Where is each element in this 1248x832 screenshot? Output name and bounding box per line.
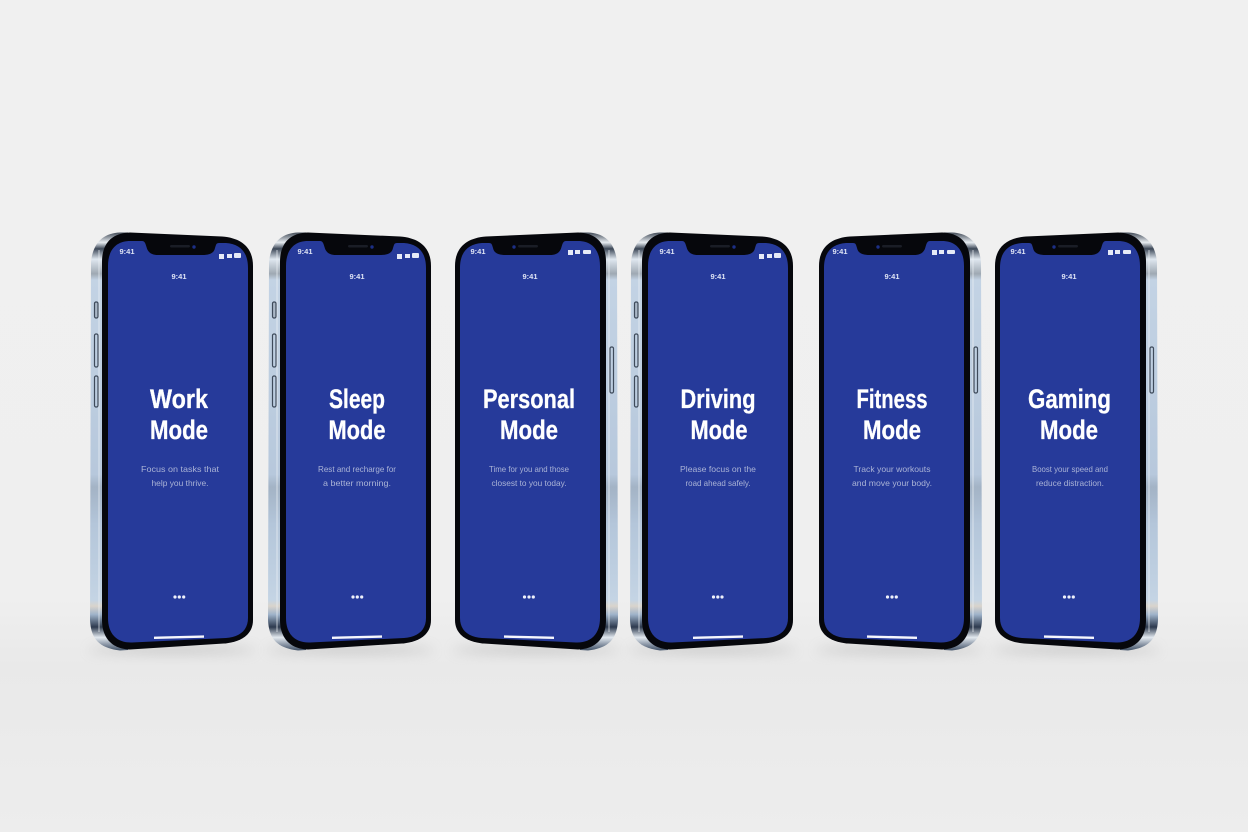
status bar icons xyxy=(219,253,241,259)
heading: Mode xyxy=(328,415,386,445)
floor shadow xyxy=(992,647,1160,653)
status bar icons xyxy=(759,253,781,259)
page dots xyxy=(173,595,185,599)
heading: Personal xyxy=(483,384,575,414)
home indicator xyxy=(504,635,554,639)
phone body xyxy=(630,232,793,650)
description xyxy=(852,464,932,488)
phone: driving mode xyxy=(628,232,796,653)
description xyxy=(1032,464,1108,488)
heading: Mode xyxy=(690,415,748,445)
floor shadow xyxy=(628,647,796,653)
description: and move your body. xyxy=(852,478,932,488)
phone: sleep mode xyxy=(266,232,434,653)
heading: Mode xyxy=(1040,415,1098,445)
floor shadow xyxy=(88,647,256,653)
clock text: 9:41 xyxy=(171,272,187,281)
description: road ahead safely. xyxy=(686,478,750,488)
heading: Fitness xyxy=(856,384,928,414)
description xyxy=(141,464,220,488)
home indicator xyxy=(693,635,743,639)
status bar icons xyxy=(1108,250,1131,255)
clock text: 9:41 xyxy=(349,272,365,281)
page dots xyxy=(523,595,535,599)
description: Track your workouts xyxy=(854,464,930,474)
status bar icons xyxy=(568,250,591,255)
description: Time for you and those xyxy=(489,464,569,474)
home indicator xyxy=(332,635,382,639)
phone body xyxy=(455,232,618,650)
phone body xyxy=(90,232,253,650)
page dots xyxy=(712,595,724,599)
page dots xyxy=(1063,595,1075,599)
status bar time: 9:41 xyxy=(119,247,135,256)
description: reduce distraction. xyxy=(1036,478,1104,488)
description xyxy=(318,464,396,488)
heading: Mode xyxy=(500,415,558,445)
phone: personal mode xyxy=(452,232,620,653)
status bar time: 9:41 xyxy=(832,247,848,256)
page dots xyxy=(351,595,363,599)
heading xyxy=(680,384,756,445)
home indicator xyxy=(154,635,204,639)
status bar time: 9:41 xyxy=(297,247,313,256)
description: closest to you today. xyxy=(492,478,566,488)
home indicator xyxy=(867,635,917,639)
heading xyxy=(483,384,575,445)
heading: Driving xyxy=(680,384,756,414)
heading xyxy=(856,384,928,445)
phone body xyxy=(995,232,1158,650)
description: help you thrive. xyxy=(152,478,208,488)
description: a better morning. xyxy=(323,478,391,488)
status bar time: 9:41 xyxy=(659,247,675,256)
description xyxy=(680,464,756,488)
phone body xyxy=(268,232,431,650)
floor shadow xyxy=(452,647,620,653)
heading: Work xyxy=(150,384,209,414)
status bar time: 9:41 xyxy=(1010,247,1026,256)
heading xyxy=(150,384,209,445)
status bar time: 9:41 xyxy=(470,247,486,256)
clock text: 9:41 xyxy=(522,272,538,281)
floor shadow xyxy=(266,647,434,653)
description xyxy=(489,464,569,488)
heading xyxy=(1028,384,1111,445)
clock text: 9:41 xyxy=(710,272,726,281)
phone body xyxy=(819,232,982,650)
page dots xyxy=(886,595,898,599)
clock text: 9:41 xyxy=(1061,272,1077,281)
home indicator xyxy=(1044,635,1094,639)
clock text: 9:41 xyxy=(884,272,900,281)
description: Focus on tasks that xyxy=(141,464,220,474)
phone: fitness mode xyxy=(816,232,984,653)
phone: work mode xyxy=(88,232,256,653)
heading: Mode xyxy=(150,415,208,445)
description: Boost your speed and xyxy=(1032,464,1108,474)
heading: Mode xyxy=(863,415,921,445)
description: Please focus on the xyxy=(680,464,756,474)
heading: Gaming xyxy=(1028,384,1111,414)
floor shadow xyxy=(816,647,984,653)
heading: Sleep xyxy=(329,384,385,414)
phone: gaming mode xyxy=(992,232,1160,653)
description: Rest and recharge for xyxy=(318,464,396,474)
status bar icons xyxy=(932,250,955,255)
heading xyxy=(328,384,386,445)
status bar icons xyxy=(397,253,419,259)
